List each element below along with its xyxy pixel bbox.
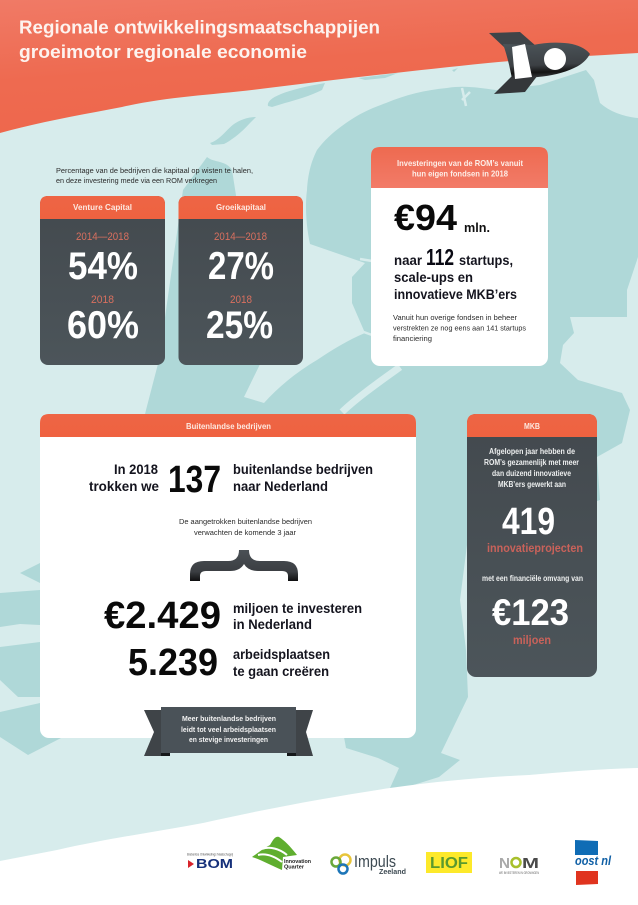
logo: NOM: [499, 855, 539, 875]
panel header: Groeikapitaal: [178, 196, 303, 219]
logo: Impuls Zeeland: Impuls: [354, 852, 396, 871]
panel: MKB: met een financiële omvang van: [482, 574, 583, 583]
logo: InnovationQuarter: Quarter: [284, 864, 305, 870]
panel: Investeringen: startups,: [459, 252, 513, 268]
panel: Buitenlandse bedrijven: in Nederland: [233, 616, 312, 632]
panel: Investeringen: naar: [394, 252, 423, 268]
logo: BOM: [187, 852, 233, 871]
logo: Impuls Zeeland: Zeeland: [379, 867, 406, 876]
panel: Buitenlandse bedrijven: 5.239: [128, 642, 218, 684]
icon: curly brace: [190, 550, 298, 581]
logo: LIOF: [426, 852, 472, 873]
panel: Groeikapitaal: 2014—2018: [214, 231, 267, 243]
panel: Investeringen: 112: [426, 244, 454, 270]
panel header: Buitenlandse bedrijven: [40, 414, 416, 437]
panel: Buitenlandse bedrijven: 137: [168, 459, 221, 501]
panel: MKB: 419: [502, 501, 555, 543]
panel: Groeikapitaal: 25%: [206, 304, 273, 347]
panel: Groeikapitaal: [178, 196, 303, 365]
panel: Buitenlandse bedrijven: te gaan creëren: [233, 663, 329, 679]
panel: Investeringen: Vanuit hun overige fondsen in beheer: [393, 313, 517, 322]
panel: MKB: MKB’ers gewerkt aan: [498, 480, 566, 489]
logo: NOM: M: [522, 855, 539, 872]
panel: Venture Capital: 2014—2018: [76, 231, 129, 243]
callout ribbon: en stevige investeringen: [189, 735, 268, 744]
panel: Investeringen: Investeringen van de ROM’s vanuit: [397, 158, 523, 168]
panel: MKB: dan duizend innovatieve: [492, 469, 571, 478]
logo: Oost NL: oost nl: [575, 853, 611, 868]
logo: Impuls Zeeland: [332, 852, 406, 876]
panel: Venture Capital: 2018: [91, 294, 114, 306]
logo: LIOF: LIOF: [430, 855, 468, 872]
map of the Netherlands: [0, 68, 638, 788]
panel: MKB: ROM’s gezamenlijk met meer: [484, 458, 579, 467]
panel header: Investeringen: [371, 147, 548, 188]
panel: MKB: Afgelopen jaar hebben de: [489, 447, 575, 456]
panel: Buitenlandse bedrijven: [40, 414, 416, 738]
panel: Investeringen: mln.: [464, 220, 490, 235]
bottom white band: [0, 768, 638, 905]
panel: Groeikapitaal: Groeikapitaal: [216, 202, 266, 212]
title: [19, 16, 380, 62]
panel: Investeringen: hun eigen fondsen in 2018: [412, 168, 508, 178]
logo: NOM: N: [499, 855, 510, 872]
title: Regionale ontwikkelingsmaatschappijen: [19, 16, 380, 38]
panel: Buitenlandse bedrijven: Buitenlandse bedrijven: [186, 421, 271, 431]
panel: Investeringen: scale-ups en: [394, 269, 473, 285]
panel: Buitenlandse bedrijven: verwachten de komende 3 jaar: [194, 528, 296, 537]
logo: NOM: WE INVESTEREN IN GRONINGEN: [499, 871, 539, 875]
caption: percentage of companies: Percentage van de bedrijven die kapitaal op wisten te halen,: [56, 166, 253, 175]
callout ribbon: leidt tot veel arbeidsplaatsen: [181, 725, 276, 734]
panel header: MKB: [467, 414, 597, 437]
panel: Venture Capital: [40, 196, 165, 365]
panel: Buitenlandse bedrijven: In 2018: [114, 461, 158, 477]
panel: Groeikapitaal: 2018: [230, 294, 252, 306]
panel: Investeringen: innovatieve MKB’ers: [394, 286, 517, 302]
panel: Buitenlandse bedrijven: €2.429: [104, 595, 221, 637]
panel: Venture Capital: 54%: [68, 245, 138, 288]
panel: Investeringen: [371, 147, 548, 366]
icon: rocket: [489, 32, 590, 94]
panel: Buitenlandse bedrijven: buitenlandse bedrijven: [233, 461, 373, 477]
panel: Buitenlandse bedrijven: De aangetrokken buitenlandse bedrijven: [179, 517, 312, 526]
logo: BOM: Brabantse Ontwikkelings Maatschappij: [187, 852, 233, 856]
panel: MKB: [467, 414, 597, 677]
logo: InnovationQuarter: Innovation: [284, 859, 312, 865]
panel header: Venture Capital: [40, 196, 165, 219]
map details: lakes and channels: [342, 88, 470, 412]
panel: MKB: innovatieprojecten: [487, 541, 583, 555]
panel: MKB: MKB: [524, 421, 540, 431]
panel: MKB: miljoen: [513, 633, 551, 647]
callout ribbon: Meer buitenlandse bedrijven: [182, 714, 276, 723]
panel: Buitenlandse bedrijven: miljoen te investeren: [233, 600, 362, 616]
callout ribbon: [144, 707, 313, 756]
caption: percentage of companies: [56, 166, 253, 185]
panel: Investeringen: financiering: [393, 334, 432, 343]
panel: Buitenlandse bedrijven: trokken we: [89, 478, 159, 494]
panel: Investeringen: verstrekten ze nog eens aan 141 startups: [393, 324, 526, 332]
panel: MKB: €123: [492, 592, 569, 633]
panel: Buitenlandse bedrijven: naar Nederland: [233, 478, 328, 494]
panel: Venture Capital: Venture Capital: [73, 202, 132, 212]
logo: BOM: BOM: [196, 857, 233, 871]
panel: Buitenlandse bedrijven: arbeidsplaatsen: [233, 646, 330, 662]
panel: Investeringen: €94: [394, 197, 457, 238]
logo: InnovationQuarter: [252, 837, 312, 870]
caption: percentage of companies: en deze investering mede via een ROM verkregen: [56, 176, 217, 185]
logo: Oost NL: [575, 840, 611, 885]
panel: Venture Capital: 60%: [67, 304, 139, 347]
header band: [0, 0, 638, 133]
title: groeimotor regionale economie: [19, 41, 307, 62]
panel: Groeikapitaal: 27%: [208, 245, 274, 288]
